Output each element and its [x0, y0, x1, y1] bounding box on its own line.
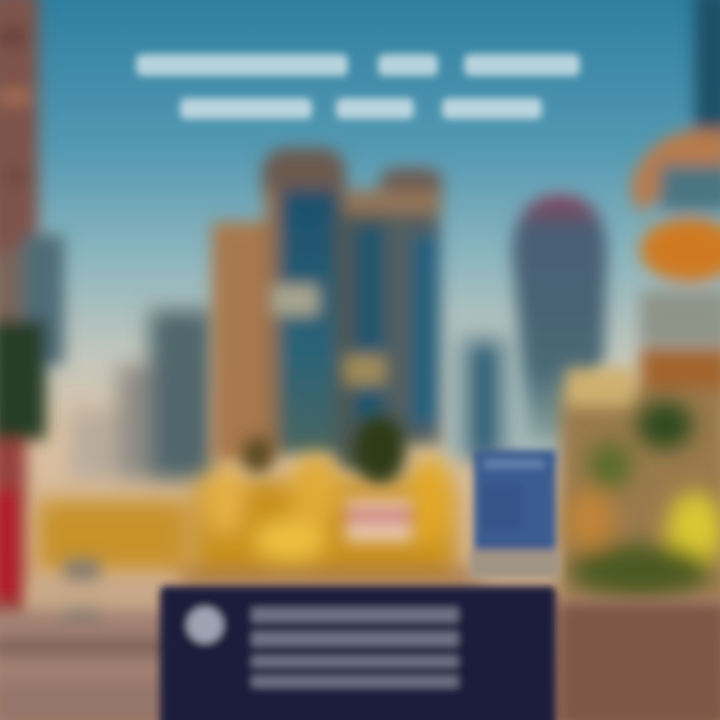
caption text (blurred) [252, 608, 458, 687]
yellow street glow [38, 454, 480, 584]
central towers [212, 148, 442, 470]
central tree and sign [242, 416, 413, 542]
distant skyline [70, 310, 570, 480]
round tower [512, 195, 607, 440]
icon: white circle [187, 607, 223, 643]
title text (blurred) [136, 54, 580, 119]
blue sign [470, 450, 560, 578]
right greenery [566, 401, 720, 596]
dark caption panel [160, 586, 556, 720]
right orange building [560, 0, 720, 600]
street [0, 560, 720, 720]
left building [0, 0, 64, 620]
